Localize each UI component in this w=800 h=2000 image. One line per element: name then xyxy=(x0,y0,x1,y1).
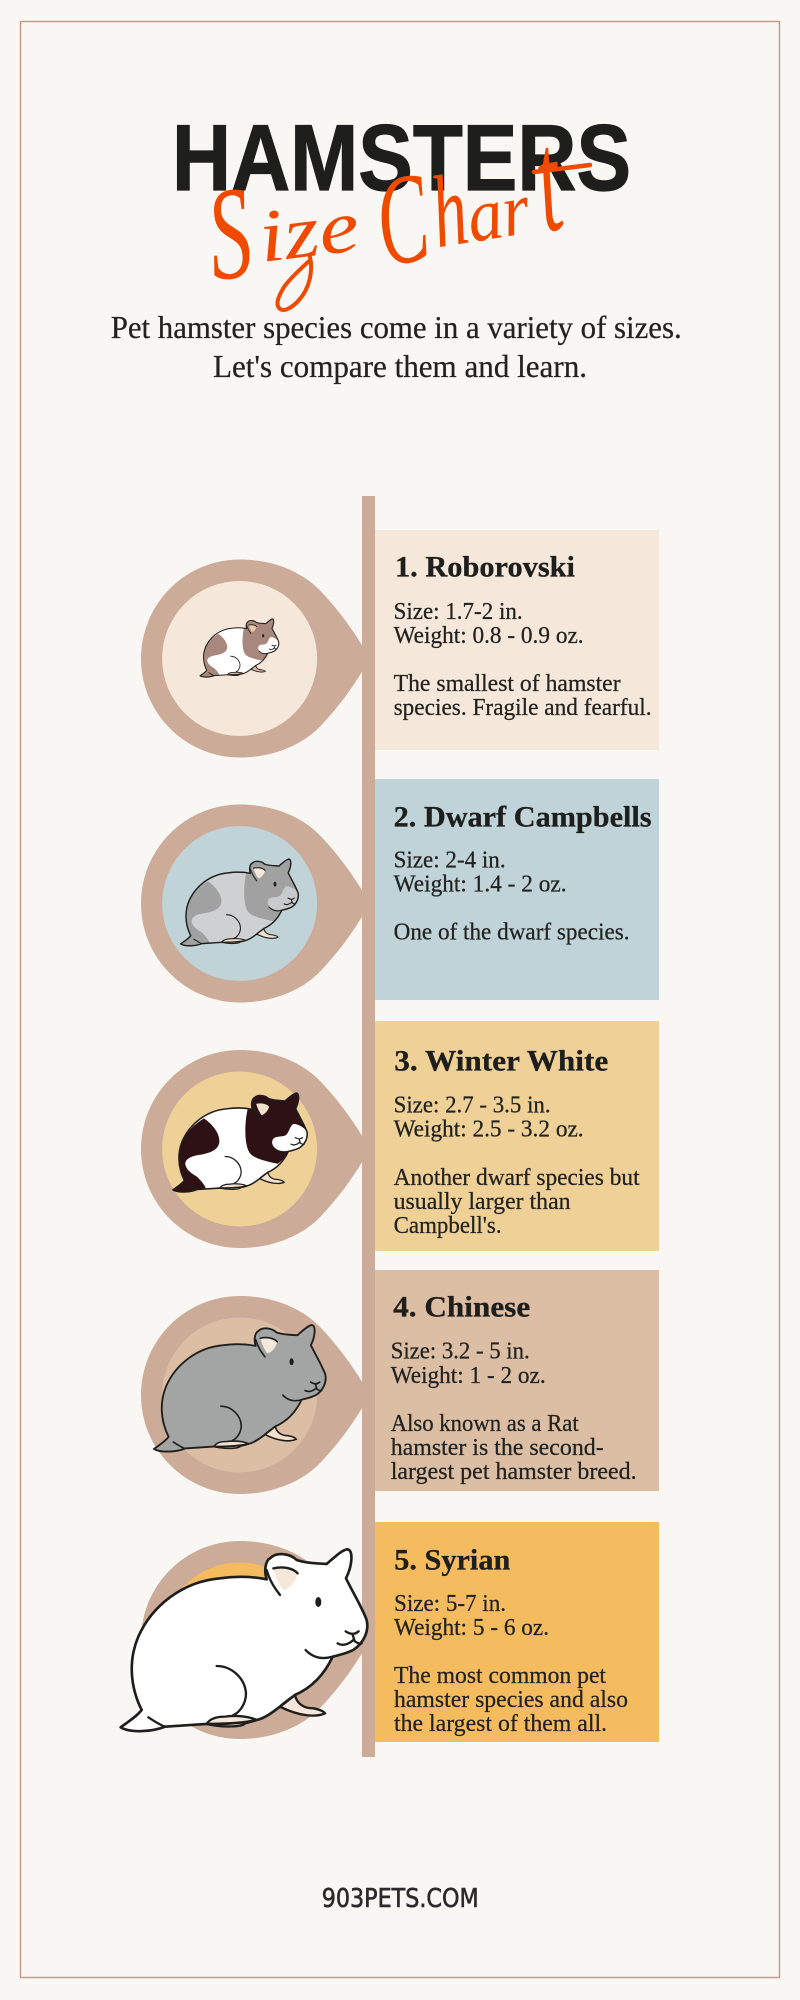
icon: Winter White hamster xyxy=(173,1093,307,1192)
panel 4: Chinese: Weight: 1 - 2 oz. xyxy=(391,1363,546,1389)
swash: z descender xyxy=(277,257,311,310)
panel 3: Winter White: Campbell's. xyxy=(394,1213,502,1239)
subtitle: Pet hamster species come in a variety of sizes. xyxy=(111,309,682,345)
teardrop 3 xyxy=(141,1050,363,1248)
panel 4: Chinese: largest pet hamster breed. xyxy=(391,1459,637,1485)
panel 1: Roborovski xyxy=(375,530,659,750)
icon: Roborovski hamster xyxy=(200,619,279,677)
title: HAMSTERS: HAMSTERS xyxy=(172,105,631,210)
panel 4: Chinese: hamster is the second- xyxy=(391,1435,604,1461)
icon: Syrian hamster xyxy=(121,1549,367,1731)
teardrop 4 xyxy=(141,1296,363,1494)
title: Size Chart script: t xyxy=(524,99,573,263)
subtitle: Let's compare them and learn. xyxy=(213,348,587,384)
panel 3: Winter White: Another dwarf species but xyxy=(394,1165,640,1191)
panel 2: Dwarf Campbells xyxy=(375,779,659,1000)
panel 5: Syrian: 5. Syrian xyxy=(394,1543,511,1576)
title: Size Chart script xyxy=(200,99,590,310)
teardrop 2 xyxy=(141,804,363,1002)
panel 1: Roborovski: 1. Roborovski xyxy=(395,551,575,584)
panel 1: Roborovski: The smallest of hamster xyxy=(394,671,621,697)
panel 2: Dwarf Campbells: Size: 2-4 in. xyxy=(394,848,506,874)
title: Size Chart script: ar xyxy=(461,167,536,259)
panel 5: Syrian xyxy=(375,1522,659,1742)
icon: Dwarf Campbells hamster xyxy=(181,859,298,946)
panel 3: Winter White: usually larger than xyxy=(394,1189,571,1215)
teardrop 5 xyxy=(141,1541,363,1739)
panel 2: Dwarf Campbells: 2. Dwarf Campbells xyxy=(394,801,652,834)
timeline bar xyxy=(362,496,375,1757)
panel 2: Dwarf Campbells: One of the dwarf species. xyxy=(394,920,630,946)
panel 4: Chinese: 4. Chinese xyxy=(393,1291,530,1324)
footer website: 903PETS.COM xyxy=(322,1884,479,1914)
title: Size Chart script: ize xyxy=(254,184,363,279)
panel 4: Chinese: Size: 3.2 - 5 in. xyxy=(391,1339,530,1365)
panel 5: Syrian: Size: 5-7 in. xyxy=(394,1591,506,1617)
panel 3: Winter White: Size: 2.7 - 3.5 in. xyxy=(394,1092,551,1118)
panel 3: Winter White: 3. Winter White xyxy=(394,1045,608,1078)
swash: t crossbar xyxy=(534,165,590,172)
title: Size Chart script: C xyxy=(366,144,439,294)
panel 1: Roborovski: Size: 1.7-2 in. xyxy=(394,599,523,625)
panel 1: Roborovski: Weight: 0.8 - 0.9 oz. xyxy=(394,623,584,649)
title: Size Chart script: S xyxy=(200,158,259,309)
panel 1: Roborovski: species. Fragile and fearful. xyxy=(394,695,652,721)
icon: Chinese hamster xyxy=(154,1325,326,1452)
subtitle xyxy=(111,309,682,384)
panel 2: Dwarf Campbells: Weight: 1.4 - 2 oz. xyxy=(394,872,567,898)
title: Size Chart script: h xyxy=(424,152,475,270)
panel 4: Chinese: Also known as a Rat xyxy=(391,1411,579,1437)
panel 3: Winter White xyxy=(375,1021,659,1251)
panel 5: Syrian: hamster species and also xyxy=(394,1687,628,1713)
panel 5: Syrian: Weight: 5 - 6 oz. xyxy=(394,1615,549,1641)
panel 3: Winter White: Weight: 2.5 - 3.2 oz. xyxy=(394,1117,584,1143)
teardrop 1 xyxy=(141,560,363,758)
panel 5: Syrian: The most common pet xyxy=(394,1663,606,1689)
panel 5: Syrian: the largest of them all. xyxy=(394,1711,607,1737)
panel 4: Chinese xyxy=(375,1270,659,1491)
